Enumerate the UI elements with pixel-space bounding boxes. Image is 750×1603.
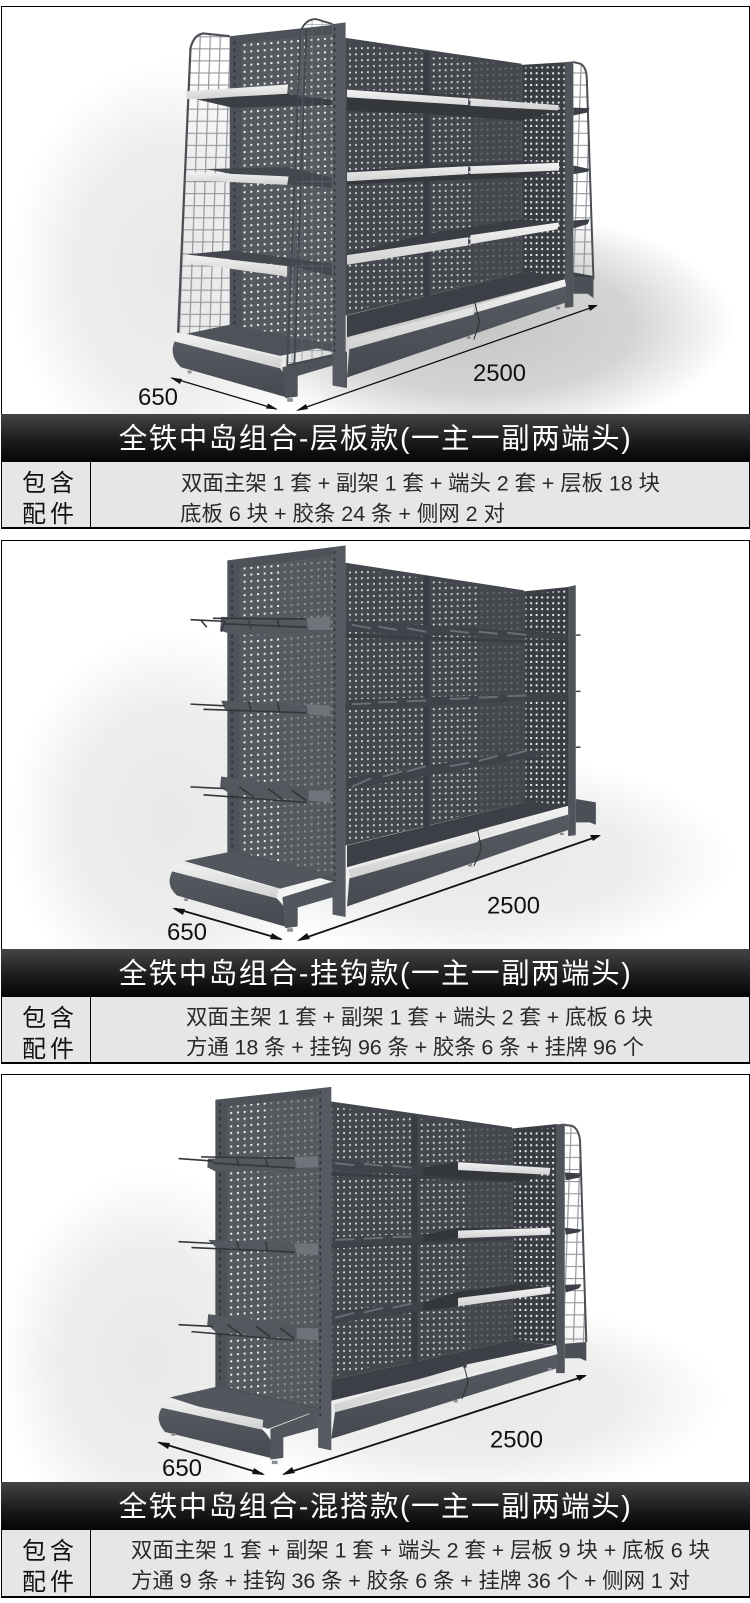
front post bbox=[333, 546, 346, 917]
right end panel bbox=[512, 1124, 558, 1345]
back panel bbox=[346, 38, 522, 315]
front side mesh bbox=[287, 19, 333, 366]
dimension label 2500: 2500 bbox=[490, 1426, 543, 1454]
panel: shelf layered model photo bbox=[1, 6, 750, 415]
back base with floor, strip and kick plate bbox=[347, 802, 568, 907]
left end hook bars bbox=[190, 616, 330, 802]
illustration: layered shelf unit bbox=[40, 18, 716, 414]
text: parts list bbox=[180, 472, 660, 526]
right side mesh bbox=[565, 1125, 586, 1342]
heading: hook model bbox=[1, 949, 750, 997]
right end panel bbox=[522, 62, 567, 281]
table: hook model accessories bbox=[1, 997, 750, 1064]
left end base bbox=[159, 1387, 331, 1464]
left end hook bars bbox=[179, 1156, 318, 1340]
label: included parts bbox=[22, 1005, 74, 1063]
label: included parts bbox=[22, 470, 74, 528]
heading: layered model: 全铁中岛组合-层板款(一主一副两端头) bbox=[119, 423, 631, 455]
text: parts list: 双面主架 1 套 + 副架 1 套 + 端头 2 套 + 层板 18 块 bbox=[181, 472, 660, 496]
dimension arrow: width bbox=[296, 305, 598, 411]
text: parts list: 双面主架 1 套 + 副架 1 套 + 端头 2 套 + 层板 9 块 + 底板 6 块 bbox=[131, 1538, 710, 1562]
front post bbox=[318, 1087, 331, 1450]
table: mixed model accessories bbox=[1, 1530, 750, 1598]
table: layered model accessories bbox=[1, 462, 750, 529]
back panel bbox=[346, 563, 524, 845]
panel: mixed model photo bbox=[1, 1074, 750, 1483]
left end shelves bbox=[186, 84, 333, 277]
back hook bars bbox=[333, 1160, 424, 1324]
heading: hook model: 全铁中岛组合-挂钩款(一主一副两端头) bbox=[119, 958, 631, 990]
text: parts list bbox=[186, 1006, 653, 1060]
right post and stub base bbox=[556, 1123, 586, 1373]
illustration: mixed shelf unit bbox=[29, 1087, 676, 1482]
back hook bars bbox=[347, 620, 567, 789]
right side mesh bbox=[573, 62, 593, 283]
right post and stub base bbox=[568, 585, 596, 836]
left end panel bbox=[230, 23, 346, 355]
text: parts list: 底板 6 块 + 胶条 24 条 + 侧网 2 对 bbox=[180, 502, 505, 526]
left end panel bbox=[215, 1087, 331, 1420]
label: included parts: 包含 bbox=[22, 1538, 74, 1565]
dimension arrow: depth bbox=[157, 1442, 265, 1475]
left side mesh bbox=[178, 33, 230, 334]
dimension label 650: 650 bbox=[138, 384, 178, 411]
left end panel bbox=[227, 546, 346, 885]
dimension arrow: depth bbox=[172, 908, 283, 940]
dimension arrow: depth bbox=[170, 378, 278, 410]
dimension label 2500: 2500 bbox=[473, 360, 526, 387]
left end base bbox=[173, 325, 347, 402]
text: parts list: 双面主架 1 套 + 副架 1 套 + 端头 2 套 + 底板 6 块 bbox=[186, 1006, 653, 1030]
right post and stub base bbox=[565, 61, 593, 308]
back base with floor, strip and kick plate bbox=[347, 272, 567, 378]
label: included parts: 配件 bbox=[22, 1569, 74, 1596]
back shelves bbox=[424, 1162, 550, 1311]
text: parts list: 方通 9 条 + 挂钩 36 条 + 胶条 6 条 + 挂牌 36 个 + 侧网 1 对 bbox=[131, 1569, 690, 1593]
back shelves bbox=[347, 89, 559, 265]
dimension label 650: 650 bbox=[162, 1455, 202, 1482]
dimension arrow: width bbox=[297, 835, 601, 941]
illustration: hook shelf unit bbox=[40, 546, 686, 949]
heading: layered model bbox=[1, 414, 750, 462]
text: parts list bbox=[131, 1538, 710, 1593]
heading: mixed model: 全铁中岛组合-混搭款(一主一副两端头) bbox=[119, 1491, 631, 1523]
dimension label 650: 650 bbox=[167, 919, 207, 946]
dimension arrow: width bbox=[282, 1375, 587, 1475]
panel: hook model photo bbox=[1, 540, 750, 949]
back base with floor, strip and kick plate bbox=[331, 1340, 558, 1439]
front post bbox=[333, 22, 346, 388]
back panel bbox=[331, 1102, 512, 1380]
right end panel bbox=[524, 587, 570, 808]
left end base bbox=[170, 852, 346, 932]
text: parts list: 方通 18 条 + 挂钩 96 条 + 胶条 6 条 + 挂牌 96 个 bbox=[186, 1036, 644, 1060]
label: included parts bbox=[22, 1538, 74, 1596]
dimension label 2500: 2500 bbox=[487, 892, 540, 920]
label: included parts: 包含 bbox=[22, 470, 74, 497]
label: included parts: 包含 bbox=[22, 1005, 74, 1032]
heading: mixed model bbox=[1, 1482, 750, 1530]
